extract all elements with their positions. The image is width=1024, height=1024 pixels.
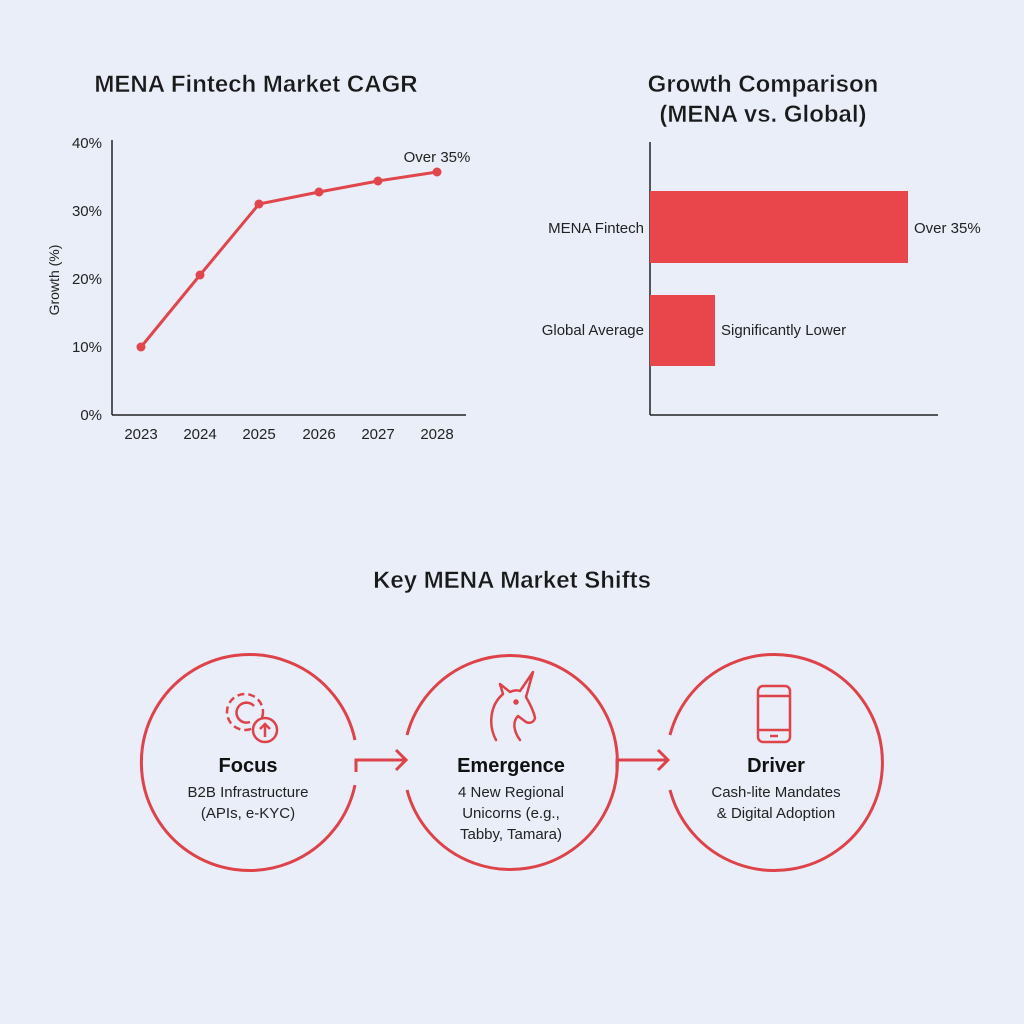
line chart: 2027 xyxy=(361,426,395,443)
title: key shifts: Key MENA Market Shifts xyxy=(373,567,651,594)
arrow 1 xyxy=(356,750,406,772)
line chart: 2023 xyxy=(124,426,158,443)
line chart: Growth (%) xyxy=(46,245,62,315)
bar chart xyxy=(542,142,981,415)
line chart: Over 35% xyxy=(404,149,470,166)
arrow 2 xyxy=(617,750,668,772)
line chart: 0% xyxy=(80,407,102,424)
circle: emergence: Tabby, Tamara) xyxy=(460,826,562,843)
title: bar chart: (MENA vs. Global) xyxy=(659,101,867,128)
circle: emergence: Unicorns (e.g., xyxy=(462,805,560,822)
line chart: 2024 xyxy=(183,426,217,443)
line chart: 2025 xyxy=(242,426,276,443)
line chart: 40% xyxy=(72,135,102,152)
circle: focus: Focus xyxy=(219,755,277,777)
bar chart: Global Average xyxy=(542,322,644,339)
line chart: 2026 xyxy=(302,426,336,443)
circle: driver: & Digital Adoption xyxy=(717,805,835,822)
title: line chart: MENA Fintech Market CAGR xyxy=(94,71,418,98)
icon: unicorn xyxy=(491,672,535,740)
circle: driver: Cash-lite Mandates xyxy=(711,784,841,801)
bar chart: Over 35% xyxy=(914,220,981,237)
bar chart: MENA Fintech xyxy=(548,220,644,237)
circle: focus: (APIs, e-KYC) xyxy=(201,805,295,822)
circle: focus xyxy=(141,655,355,871)
icon: phone xyxy=(758,686,790,742)
line chart xyxy=(46,135,470,443)
circle: driver: Driver xyxy=(747,755,805,777)
circle: driver xyxy=(670,655,882,871)
bar chart: Significantly Lower xyxy=(721,322,846,339)
circle: focus: B2B Infrastructure xyxy=(188,784,308,801)
icon: gear xyxy=(227,694,277,742)
circle: emergence: 4 New Regional xyxy=(458,784,564,801)
circle: emergence xyxy=(407,656,617,870)
circle: emergence: Emergence xyxy=(457,755,565,777)
line chart: 2028 xyxy=(420,426,454,443)
title: bar chart: Growth Comparison xyxy=(648,71,878,98)
line chart: 10% xyxy=(72,339,102,356)
line chart: 30% xyxy=(72,203,102,220)
line chart: 20% xyxy=(72,271,102,288)
